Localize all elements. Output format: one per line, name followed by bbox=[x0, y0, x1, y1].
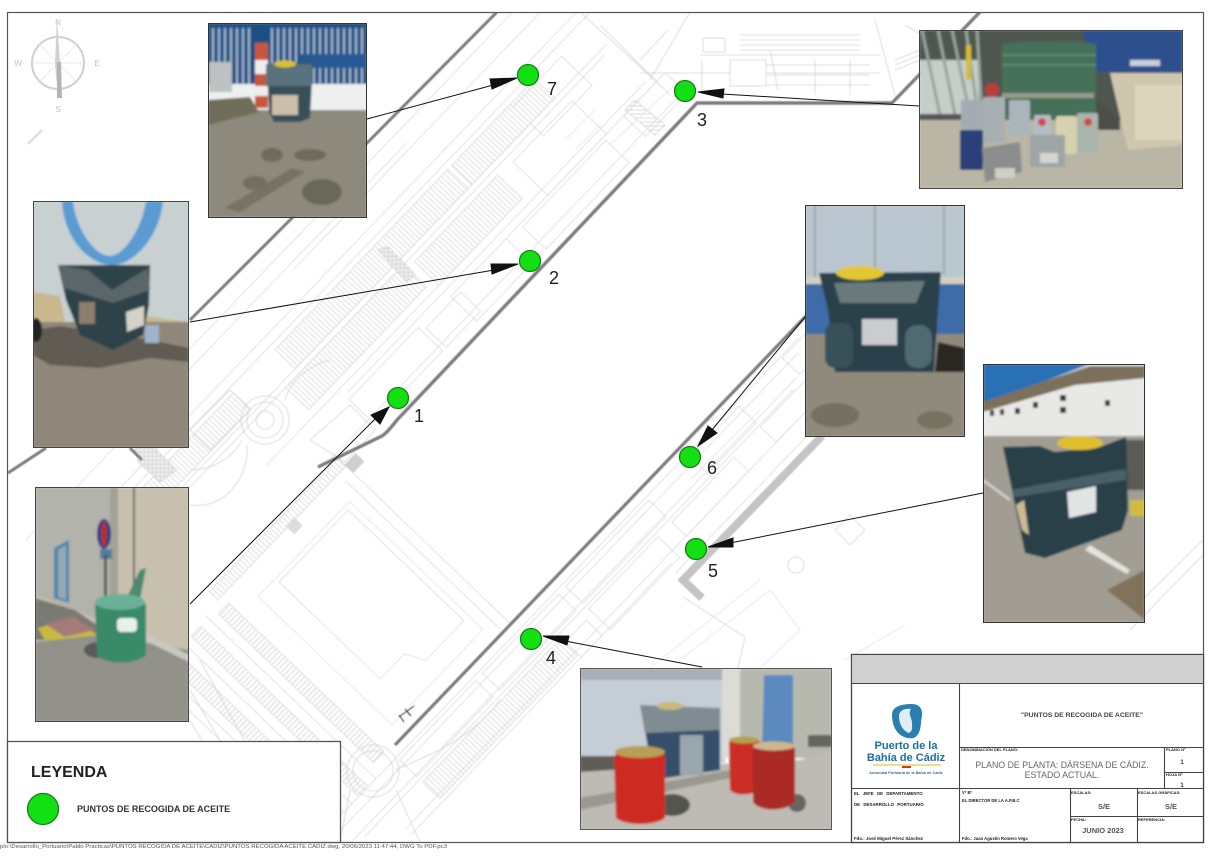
director signature: Vº Bº bbox=[962, 790, 973, 795]
marker: point 1: 1 bbox=[414, 406, 424, 426]
icon: north compass rose: E bbox=[94, 59, 100, 68]
arrow: photo 5 to point 5 bbox=[708, 493, 983, 547]
right side bbox=[683, 540, 1203, 680]
scale and date: FECHA: bbox=[1071, 817, 1086, 822]
arrow: photo 7 to point 7 bbox=[367, 78, 517, 119]
plan and sheet numbers: HOJA Nº bbox=[1166, 772, 1183, 777]
map: lower band outer lanes bbox=[406, 380, 807, 834]
marker: point 5 bbox=[686, 538, 718, 581]
marker: point 4 bbox=[520, 628, 556, 668]
panel: legend bbox=[8, 742, 340, 842]
scale and date: ESCALAS: bbox=[1071, 790, 1091, 795]
file path footer: plo:\Desarrollo_Portuario\Pablo Practicas\PUNTOS RECOGIDA DE ACEITE\CADIZ\PUNTOS RECOGIDA ACEITE CADIZ.dwg, 20/06/2023 11:47:44, DWG To PDF.pc3 bbox=[0, 844, 447, 850]
photo 7: oil container by blue fence bbox=[208, 23, 367, 218]
scale and date bbox=[1071, 790, 1180, 835]
map: quay lines bbox=[8, 12, 980, 745]
marker: point 4: 4 bbox=[546, 648, 556, 668]
plan designation bbox=[961, 747, 1149, 780]
photo 3: oil tank with jerrycans bbox=[919, 30, 1183, 189]
block title: "PUNTOS DE RECOGIDA DE ACEITE" bbox=[1021, 712, 1143, 719]
department head signature: EL JEFE DE DEPARTAMENTO bbox=[854, 791, 923, 796]
director signature: Fdo.: Juan Agustín Romero Vega bbox=[962, 836, 1028, 841]
scale and date: REFERENCIA: bbox=[1138, 817, 1165, 822]
plan designation: PLANO DE PLANTA: DÁRSENA DE CÁDIZ. bbox=[975, 760, 1149, 770]
photo 1: green oil container at building corner bbox=[35, 487, 189, 722]
logo: Puerto de la Bahia de Cadiz: Puerto de la bbox=[875, 740, 938, 752]
department head signature: Fdo.: José Miguel Pérez Sánchez bbox=[854, 836, 924, 841]
map: hatched crossing bbox=[135, 246, 416, 482]
marker: point 7: 7 bbox=[547, 79, 557, 99]
marker: point 2 bbox=[520, 250, 559, 288]
marker: point 2: 2 bbox=[549, 268, 559, 288]
marker: point 3 bbox=[674, 80, 707, 130]
logo: Puerto de la Bahia de Cadiz bbox=[867, 704, 946, 775]
arrow: photo 3 to point 3 bbox=[698, 89, 919, 106]
icon: north compass rose: S bbox=[55, 105, 61, 114]
plan designation: DENOMINACIÓN DEL PLANO: bbox=[961, 747, 1018, 752]
icon: north compass rose: W bbox=[14, 59, 22, 68]
panel: title block bbox=[851, 654, 1204, 843]
icon: north compass rose bbox=[14, 18, 100, 144]
director signature bbox=[962, 790, 1028, 841]
marker: point 6 bbox=[680, 446, 717, 478]
legend marker bbox=[28, 794, 58, 824]
scale and date: ESCALAS GRÁFICAS: bbox=[1138, 790, 1180, 795]
scale and date: JUNIO 2023 bbox=[1082, 826, 1124, 835]
department head signature bbox=[854, 791, 924, 841]
photo 5: dark oil container by warehouse bbox=[983, 364, 1145, 623]
legend label: PUNTOS DE RECOGIDA DE ACEITE bbox=[77, 804, 230, 814]
department head signature: DE DESARROLLO PORTUARIO bbox=[854, 802, 924, 807]
photo 6: dark oil container by the dock bbox=[805, 205, 965, 437]
icon: north compass rose: N bbox=[55, 18, 61, 27]
logo: Puerto de la Bahia de Cadiz: Autoridad Portuaria de la Bahía de Cádiz bbox=[869, 771, 943, 775]
grey header band bbox=[852, 655, 1203, 683]
plan and sheet numbers: 1 bbox=[1180, 782, 1184, 789]
marker: point 3: 3 bbox=[697, 110, 707, 130]
scale and date: S/E bbox=[1165, 802, 1177, 811]
marker: point 6: 6 bbox=[707, 458, 717, 478]
plan and sheet numbers: PLANO Nº bbox=[1166, 747, 1186, 752]
map: upper band road and parking lines bbox=[26, 13, 680, 540]
director signature: EL DIRECTOR DE LA A.P.B.C bbox=[962, 798, 1020, 803]
arrow: photo 4 to point 4 bbox=[543, 636, 702, 667]
legend heading: LEYENDA bbox=[31, 764, 108, 781]
plan designation: ESTADO ACTUAL. bbox=[1025, 770, 1099, 780]
photo 4: red barrels and container bbox=[580, 668, 832, 830]
scale and date: S/E bbox=[1098, 802, 1110, 811]
marker: point 5: 5 bbox=[708, 561, 718, 581]
map: inner dock quay wall (grey band) bbox=[683, 436, 822, 598]
map: lower band near quay bbox=[341, 334, 805, 840]
map: lower-left block and parking strips bbox=[189, 453, 509, 813]
marker: point 1 bbox=[388, 388, 424, 426]
plan and sheet numbers: 1 bbox=[1180, 759, 1184, 766]
arrow: photo 2 to point 2 bbox=[190, 264, 518, 322]
plan and sheet numbers bbox=[1166, 747, 1186, 789]
logo: Puerto de la Bahia de Cadiz: Bahía de Cádiz bbox=[867, 752, 946, 764]
marker: point 7 bbox=[518, 64, 557, 99]
arrow: photo 1 to point 1 bbox=[190, 407, 389, 604]
roundabouts bbox=[241, 396, 289, 444]
photo 2: oil container by wall with blue ring bbox=[30, 201, 189, 448]
arrow: photo 6 to point 6 bbox=[698, 317, 805, 446]
